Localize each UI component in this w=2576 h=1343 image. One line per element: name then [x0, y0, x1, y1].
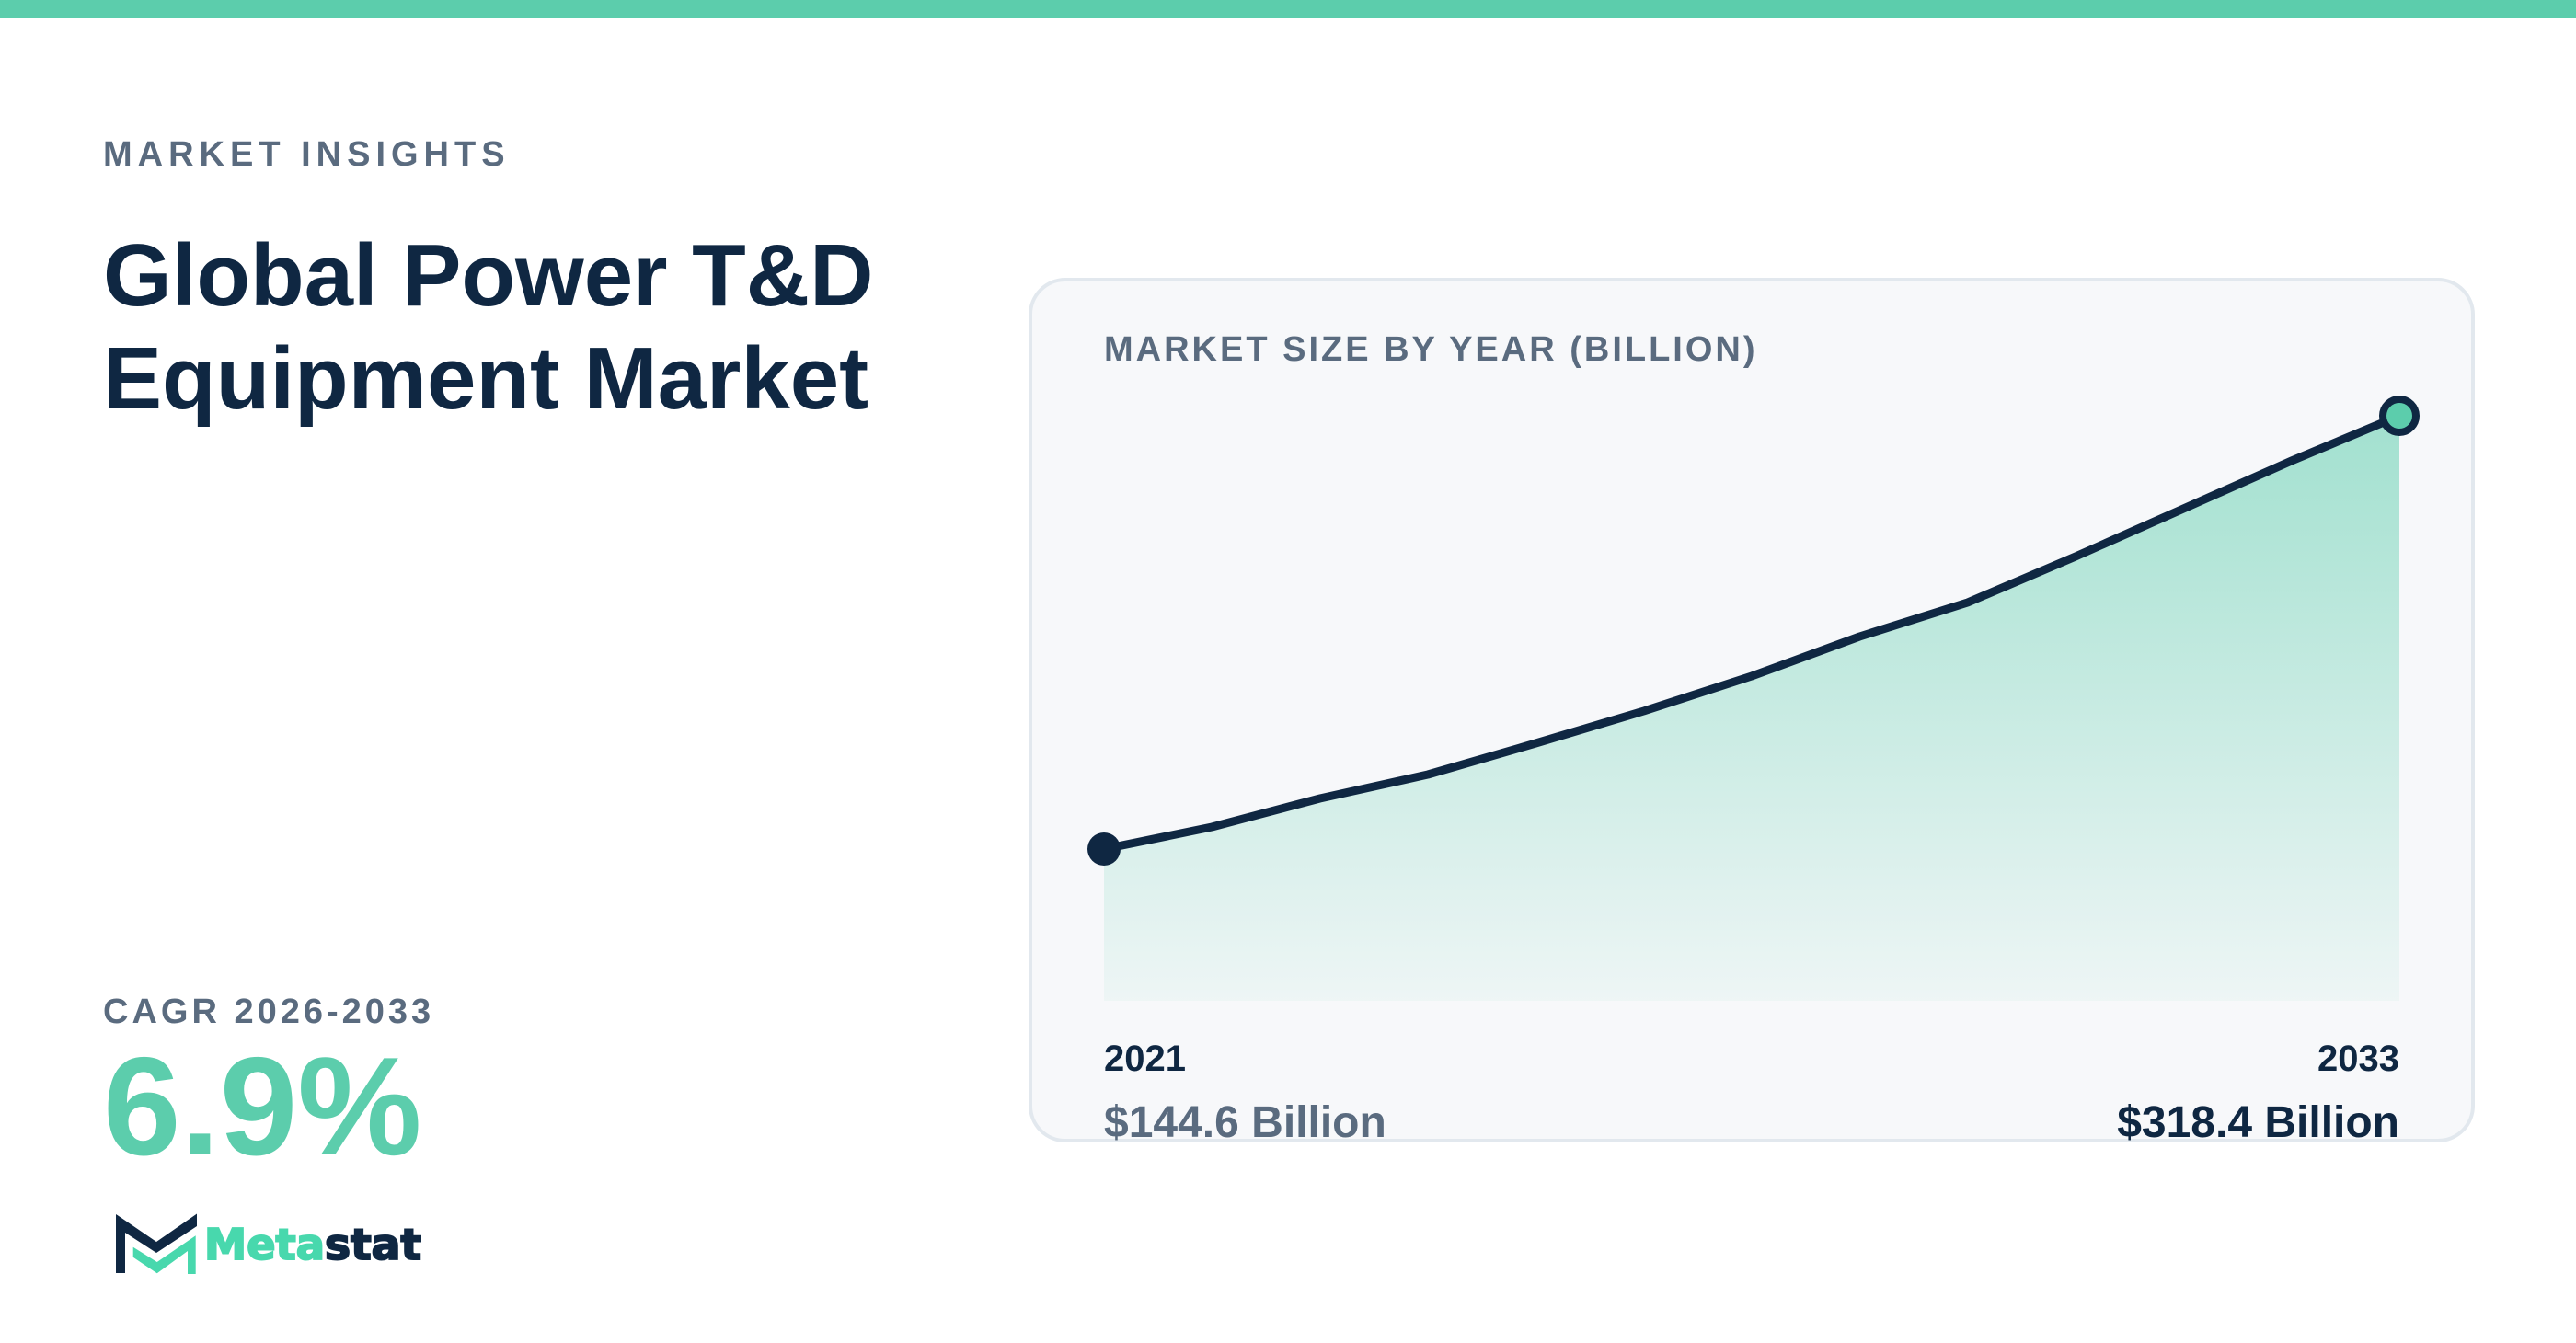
title: Global Power T&D [103, 226, 873, 325]
logo: Metastat: stat [325, 1220, 421, 1269]
title [103, 226, 873, 428]
eyebrow: market insights: MARKET INSIGHTS [103, 135, 511, 174]
logo: Metastat: Meta [204, 1220, 325, 1269]
CAGR value: 6.9% [103, 1028, 421, 1185]
title: Equipment Market [103, 329, 868, 428]
start value: $144.6 Billion [1104, 1098, 1386, 1147]
top accent bar [0, 0, 2576, 18]
panel: market size chart card [1029, 278, 2475, 1142]
CAGR label: CAGR 2026-2033 [103, 993, 434, 1031]
end value: $318.4 Billion [2117, 1098, 2399, 1147]
chart heading: MARKET SIZE BY YEAR (BILLION) [1104, 330, 1758, 369]
start year label: 2021 [1104, 1039, 1186, 1079]
end year label: 2033 [2317, 1039, 2399, 1079]
